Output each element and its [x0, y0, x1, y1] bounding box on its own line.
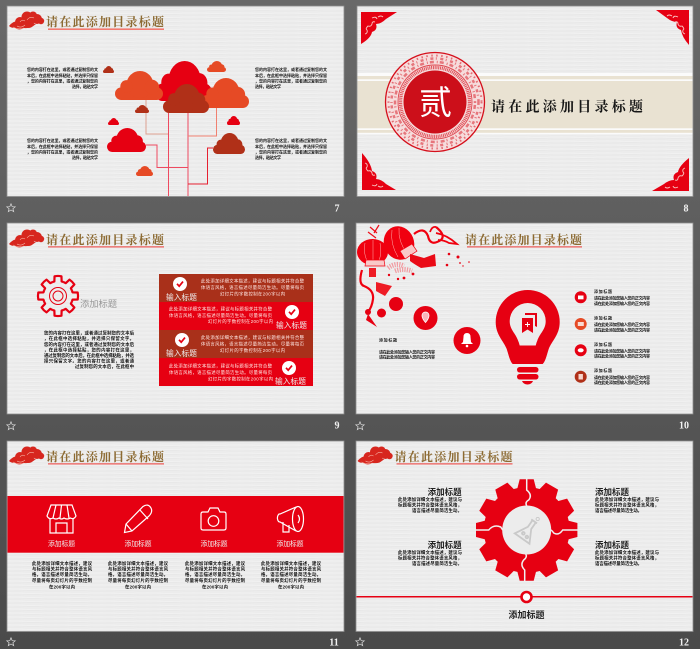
text block: upper left — [398, 487, 463, 514]
text block: upper right: 此处添加详细文本描述，建议与 — [595, 496, 660, 503]
corner ornament: bottom left — [362, 153, 396, 190]
header: slide 9 title: 请在此添加目录标题 — [46, 232, 164, 247]
text block: upper left: 本后，在此框中选择粘贴，并选择只保留 — [27, 72, 98, 78]
list row 4: 此处添加详细文本描述，建议与标题相关并符合整 — [169, 362, 273, 370]
list item 2: 添加标题 — [594, 314, 612, 320]
text block: upper left: 您的内容打在这里，或者通过复制您的文 — [27, 66, 98, 72]
list row 4 — [169, 361, 306, 386]
text block: lower left — [398, 540, 463, 567]
text block: upper left: ，您的内容打在这里，或者通过复制您的 — [27, 78, 98, 84]
column 3 text — [185, 560, 246, 590]
column 1 text: 与标题相关并符合整体语言风 — [32, 566, 93, 572]
panel: slide 12 puzzle gear — [356, 441, 693, 632]
text block: left — [379, 336, 435, 360]
column 3: camera — [200, 508, 228, 548]
text block: lower left: ，您的内容打在这里，或者通过复制您的 — [27, 148, 98, 154]
column 4 text — [261, 560, 322, 590]
list item 4: 请在此处添加您输入您的正文内容 — [594, 379, 650, 385]
footer: slide 7 — [7, 204, 340, 214]
text block: gear description: 择只保留文字。您的内容打在这里，或者通 — [44, 358, 135, 364]
text block: lower left — [27, 137, 98, 160]
column 2 text: 尽量将每页幻灯片的字数控制 — [108, 577, 169, 584]
gear puzzle — [475, 478, 579, 582]
column 4 text: 在200字以内 — [278, 584, 305, 590]
text block: left: 请在此处添加您输入您的正文内容 — [379, 354, 435, 360]
column 3 text: 此处添加详细文本描述，建议 — [185, 560, 246, 567]
footer: slide 8: 8 — [684, 204, 688, 214]
footer: slide 9: 9 — [334, 420, 340, 432]
column 2 text: 格。语言描述尽量简洁生动。 — [108, 571, 168, 578]
text block: gear description: 通过复制您的文本后，在此框中选择粘贴，并选 — [44, 352, 135, 359]
header: slide 12 title: 请在此添加目录标题 — [394, 449, 512, 464]
red band — [8, 496, 344, 553]
list item 1: 添加标题 — [594, 288, 612, 294]
text block: left: 请在此处添加您输入您的正文内容 — [379, 348, 435, 354]
text block: upper right — [595, 487, 660, 514]
corner ornament: top left — [361, 12, 397, 44]
panel: slide 7 cloud tree — [7, 6, 344, 196]
list row 2: 此处添加详细文本描述，建议与标题相关并符合整 — [169, 306, 273, 312]
column 2 text: 与标题相关并符合整体语言风 — [108, 566, 169, 572]
cream band — [358, 73, 692, 134]
text block: gear description: 您的内容打在这里，或者通过复制您的文本后 — [44, 341, 135, 348]
list item 2: 请在此处添加您输入您的正文内容 — [594, 326, 650, 332]
text block: lower right: ，您的内容打在这里，或者通过复制您的 — [255, 148, 327, 154]
footer: slide 11 — [7, 638, 339, 648]
text block: lower right: 语言描述尽量简洁生动。 — [595, 560, 642, 567]
list row 4: 幻灯片的字数控制在200字以内 — [208, 376, 273, 382]
list row 4: 输入标题 — [275, 376, 306, 386]
header: slide 11 title: 请在此添加目录标题 — [46, 449, 164, 464]
footer: slide 10 — [356, 420, 689, 432]
panel: slide 10 light bulb — [356, 222, 693, 414]
icon: location circle — [414, 306, 438, 330]
text block: lower left: 添加标题 — [428, 540, 462, 550]
corner ornament: bottom right — [652, 158, 689, 191]
list row 2: 体语言风格，语言描述尽量简洁生动。尽量将每页 — [169, 312, 273, 319]
column 1 text: 此处添加详细文本描述，建议 — [32, 560, 93, 567]
icon: flask — [515, 516, 542, 544]
column 4 text: 此处添加详细文本描述，建议 — [261, 560, 322, 567]
icon: light bulb — [496, 290, 560, 384]
text block: left: 添加标题 — [379, 336, 397, 342]
list item 1: 请在此处添加您输入您的正文内容 — [594, 294, 650, 300]
text block: upper right: 标题相关并符合整体语言风格， — [595, 502, 659, 508]
list row 3: 体语言风格，语言描述尽量简洁生动。尽量将每页 — [201, 340, 305, 348]
header: slide 7 title: 请在此添加目录标题 — [46, 14, 164, 29]
list row 1: 幻灯片的字数控制在200字以内 — [220, 290, 285, 298]
text block: upper right: 语言描述尽量简洁生动。 — [595, 507, 642, 514]
column 3 text: 与标题相关并符合整体语言风 — [185, 566, 246, 572]
text block: lower right: 此处添加详细文本描述，建议与 — [595, 549, 660, 556]
list row 1: 此处添加详细文本描述，建议与标题相关并符合整 — [201, 278, 305, 284]
panel: slide 8 section divider — [357, 6, 693, 196]
text block: lower right: 标题相关并符合整体语言风格， — [595, 554, 659, 562]
timeline marker — [356, 592, 692, 602]
column 3: camera: 添加标题 — [200, 539, 228, 548]
text block: lower right — [595, 540, 660, 567]
footer: slide 9 — [7, 420, 340, 432]
list row 1 — [166, 277, 305, 302]
text block: gear description: 过复制您的文本后，在此框中 — [75, 363, 135, 370]
header: slide 9 title — [9, 230, 164, 248]
header: slide 10 title: 请在此添加目录标题 — [465, 232, 582, 247]
text block: upper right: 添加标题 — [595, 487, 630, 497]
icon: bell circle — [454, 327, 480, 354]
list item 1: 请在此处添加您输入您的正文内容 — [594, 300, 650, 306]
text block: lower left: 此处添加详细文本描述，建议与 — [398, 549, 463, 556]
list item 3: 添加标题 — [594, 341, 612, 347]
text block: upper left: 此处添加详细文本描述，建议与 — [398, 496, 463, 503]
text block: lower right: 本后，在此框中选择粘贴，并选择只保留 — [255, 143, 327, 149]
column 2: pencil: 添加标题 — [124, 539, 152, 548]
text block: upper right: 选择，粘贴文字 — [255, 83, 281, 89]
header: slide 12 title — [358, 446, 512, 464]
list item 4 — [575, 367, 650, 385]
column 3 text: 尽量将每页幻灯片的字数控制 — [185, 577, 246, 584]
list row 3 — [166, 333, 305, 358]
text block: upper left — [27, 66, 98, 89]
text block: lower left: 标题相关并符合整体语言风格， — [398, 554, 462, 562]
list item 4: 添加标题 — [594, 367, 612, 373]
text block: upper left: 标题相关并符合整体语言风格， — [398, 502, 462, 508]
text block: lower left: 本后，在此框中选择粘贴，并选择只保留 — [27, 143, 98, 149]
column 1: store: 添加标题 — [48, 539, 75, 548]
text block: lower left: 选择，粘贴文字 — [72, 154, 98, 160]
column 1 text: 在200字以内 — [49, 584, 76, 590]
list row 1: 体语言风格，语言描述尽量简洁生动。尽量将每页 — [201, 284, 305, 291]
text block: lower right: 您的内容打在这里，或者通过复制您的文 — [255, 137, 327, 143]
column 2 text: 在200字以内 — [125, 584, 152, 590]
column 3 text: 在200字以内 — [202, 584, 229, 590]
header: slide 11 title — [9, 446, 164, 464]
list row 2: 幻灯片的字数控制在200字以内 — [208, 318, 273, 325]
list item 1 — [575, 288, 650, 306]
medallion with numeral — [386, 52, 484, 152]
decorative dots — [377, 297, 403, 318]
text block: upper left: 选择，粘贴文字 — [72, 83, 98, 89]
column 3 text: 格。语言描述尽量简洁生动。 — [185, 571, 245, 578]
list row 3: 输入标题 — [166, 348, 197, 358]
column 1 text — [32, 560, 93, 590]
column 1: store — [47, 505, 76, 548]
list item 2: 请在此处添加您输入您的正文内容 — [594, 321, 650, 327]
panel: slide 9 gear and list — [7, 223, 344, 414]
column 2: pencil — [124, 505, 152, 548]
text block: lower left: 语言描述尽量简洁生动。 — [412, 560, 462, 567]
text block: lower left: 您的内容打在这里，或者通过复制您的文 — [27, 137, 98, 143]
footer: slide 12: 12 — [679, 638, 689, 648]
medallion with numeral: 贰 — [419, 76, 452, 124]
list row 2 — [169, 305, 307, 330]
list item 3: 请在此处添加您输入您的正文内容 — [594, 353, 650, 359]
text block: lower right: 选择，粘贴文字 — [255, 154, 281, 160]
list item 3: 请在此处添加您输入您的正文内容 — [594, 347, 650, 353]
section title: 请在此添加目录标题 — [491, 98, 643, 116]
panel: slide 11 icon band — [7, 441, 344, 632]
text block: upper right: 您的内容打在这里，或者通过复制您的文 — [255, 66, 327, 72]
column 4: megaphone — [276, 506, 304, 548]
text block: gear description: 您的内容打在这里，或者通过复制您的文本后 — [44, 330, 135, 336]
text block: gear description: ，在此框中选择粘贴，您的内容打在这里， — [44, 346, 134, 354]
text block: upper left: 语言描述尽量简洁生动。 — [412, 507, 462, 514]
icon: gear — [38, 276, 78, 316]
column 2 text: 此处添加详细文本描述，建议 — [108, 560, 169, 567]
list item 2 — [575, 314, 650, 332]
illustration: paper-cut lanterns — [357, 222, 470, 327]
footer: slide 12 — [356, 638, 689, 648]
list item 3 — [575, 341, 650, 359]
connector lines — [146, 100, 216, 196]
column 1 text: 尽量将每页幻灯片的字数控制 — [32, 577, 93, 584]
list item 4: 请在此处添加您输入您的正文内容 — [594, 374, 650, 380]
text block: gear description: ，在此框中选择粘贴，并选择只保留文字。 — [44, 335, 134, 342]
footer: slide 7: 7 — [334, 204, 340, 214]
column 1 text: 格。语言描述尽量简洁生动。 — [32, 571, 92, 578]
list row 2: 输入标题 — [276, 320, 307, 330]
list row 3: 此处添加详细文本描述，建议与标题相关并符合整 — [201, 334, 305, 341]
text block: lower right — [255, 137, 327, 160]
list row 1: 输入标题 — [166, 292, 197, 302]
column 4 text: 尽量将每页幻灯片的字数控制 — [261, 577, 322, 584]
text block: upper right: 本后，在此框中选择粘贴，并选择只保留 — [255, 72, 327, 78]
column 4: megaphone: 添加标题 — [276, 539, 304, 548]
header: slide 7 title — [9, 12, 164, 30]
gear label: 添加标题 — [80, 298, 117, 309]
cloud group — [103, 61, 249, 176]
footer: slide 10: 10 — [679, 420, 689, 432]
column 4 text: 与标题相关并符合整体语言风 — [261, 566, 322, 572]
text block: lower right: 添加标题 — [595, 540, 630, 550]
text block: upper right: ，您的内容打在这里，或者通过复制您的 — [255, 78, 327, 84]
column 4 text: 格。语言描述尽量简洁生动。 — [261, 571, 321, 578]
bottom heading: 添加标题 — [508, 609, 545, 620]
footer: slide 11: 11 — [329, 638, 339, 648]
text block: upper left: 添加标题 — [428, 487, 462, 497]
list row 4: 体语言风格，语言描述尽量简洁生动。尽量将每页 — [169, 369, 273, 376]
text block: upper right — [255, 66, 327, 89]
column 2 text — [108, 560, 169, 590]
text block: gear description — [44, 330, 135, 370]
corner ornament: top right — [656, 10, 689, 45]
panel: red list — [159, 274, 313, 386]
list row 3: 幻灯片的字数控制在200字以内 — [220, 347, 285, 354]
